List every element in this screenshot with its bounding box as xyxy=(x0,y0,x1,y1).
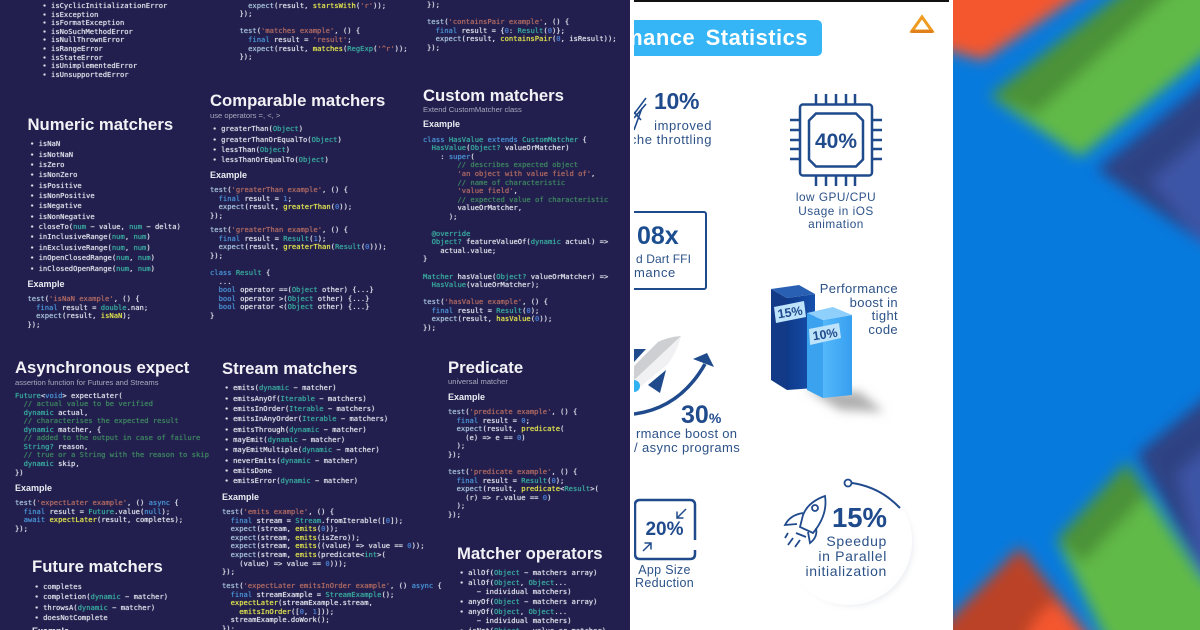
list: future matchers: • throwsA(dynamic − matcher) xyxy=(34,603,155,612)
icon: cache throttling partial xyxy=(634,98,647,130)
panel: dark Flutter matchers cheat sheet xyxy=(0,0,630,630)
list: stream matchers: • emits(dynamic − matcher) xyxy=(224,383,337,392)
list: future matchers xyxy=(34,582,168,622)
chart: 3D bars 15 and 10 percent: 15% xyxy=(777,304,804,321)
list: matcher operators: • anyOf(Object − matchers array) xyxy=(460,597,597,606)
list: stream matchers xyxy=(224,383,388,485)
list: numeric matchers: • isNegative xyxy=(30,201,82,210)
subtitle: asynchronous expect description: assertion function for Futures and Streams xyxy=(15,378,159,386)
stat: 15 percent: 15% xyxy=(832,502,887,533)
icon: white rocket with arrow arc xyxy=(634,336,714,416)
code: greaterThan examples: test('greaterThan example', () { final result = Result(1); expect(result, greaterThan(Result(0))); }); xyxy=(210,225,387,260)
label: performance boost in tight code: Performance xyxy=(820,281,898,296)
list: stream matchers: • emitsDone xyxy=(224,466,272,475)
label: improved cache throttling: che throttling xyxy=(630,132,712,146)
label: low GPU CPU usage: Usage in iOS xyxy=(798,204,874,218)
heading: predicate: Predicate xyxy=(448,358,523,377)
code: greaterThan examples: class Result { ... bool operator ==(Object other) {...} bool operator >(Object other) {...} bool operator <(Object other) {...} } xyxy=(210,268,374,320)
icon: rocket outline and arc xyxy=(784,478,901,548)
heading: comparable matchers: Comparable matchers xyxy=(210,91,385,110)
code: greaterThan examples: test('greaterThan example', () { final result = 1; expect(result, greaterThan(0)); }); xyxy=(210,185,352,220)
label: improved cache throttling: improved xyxy=(654,118,712,133)
heading: future matchers: Future matchers xyxy=(32,557,163,576)
heading: custom matchers: Custom matchers xyxy=(423,86,564,105)
chart: 3D bars 15 and 10 percent: 10% xyxy=(812,326,839,343)
label: Dart FFI performance: d Dart FFI xyxy=(636,252,691,266)
label: low GPU CPU usage xyxy=(796,190,876,231)
label: app size reduction: Reduction xyxy=(635,576,694,590)
list: numeric matchers: • isNaN xyxy=(30,139,60,148)
label: async programs: / async programs xyxy=(634,440,740,454)
chart: 3D bars 15 and 10 percent xyxy=(771,285,884,418)
list: stream matchers: • emitsInAnyOrder(Iterable − matchers) xyxy=(224,414,388,423)
list: numeric matchers: • isNonNegative xyxy=(30,212,95,221)
label: custom example: Example xyxy=(423,119,460,129)
list: numeric matchers: • inClosedOpenRange(num, num) xyxy=(30,264,155,273)
heading: asynchronous expect: Asynchronous expect xyxy=(15,358,189,377)
stat box: 08x Dart FFI xyxy=(624,211,707,290)
label: speedup in parallel initialization xyxy=(806,532,887,578)
list: comparable matchers: • lessThan(Object) xyxy=(212,145,290,154)
label: speedup in parallel initialization: in Parallel xyxy=(818,548,887,564)
label: low GPU CPU usage: animation xyxy=(808,217,864,231)
label: speedup in parallel initialization: Speedup xyxy=(826,532,887,548)
list: numeric matchers: • isPositive xyxy=(30,181,82,190)
list: stream matchers: • emitsError(dynamic − matcher) xyxy=(224,476,358,485)
label: performance boost in tight code: tight xyxy=(872,308,898,323)
label: performance boost in tight code xyxy=(820,281,898,336)
list: matcher operators: • allOf(Object, Object... − individual matchers) xyxy=(460,578,572,596)
code: greaterThan examples xyxy=(210,185,387,320)
code: isNaN example: test('isNaN example', () { final result = double.nan; expect(result, isNaN); }); xyxy=(28,294,148,329)
icon: chip with 40 percent xyxy=(790,94,882,186)
subtitle: universal matcher: universal matcher xyxy=(448,377,508,386)
list: stream matchers: • neverEmits(dynamic − matcher) xyxy=(224,456,358,465)
list: future matchers: • doesNotComplete xyxy=(34,613,108,622)
code: HasValue custom matcher: class HasValue extends CustomMatcher { HasValue(Object? valueOrMatcher) : super( // describes expected object 'an object with value field of', // name of characteristic 'value field', // expected value of characteristic valueOrMatcher, ); @override Object? featureValueOf(dynamic actual) => actual.value; } Matcher hasValue(Object? valueOrMatcher) => HasValue(valueOrMatcher); test('hasValue example', () { final result = Result(0); expect(result, hasValue(0)); }); xyxy=(423,135,608,332)
label: numeric example: Example xyxy=(28,278,65,288)
stat: 10 percent: 10% xyxy=(654,88,699,114)
heading: stream matchers: Stream matchers xyxy=(222,359,357,378)
list: comparable matchers xyxy=(212,124,342,164)
label: performance fragment: mance xyxy=(634,264,676,280)
list: matcher operators xyxy=(460,568,606,630)
list: numeric matchers: • isNotNaN xyxy=(30,150,73,159)
icon: orange triangle logo xyxy=(909,14,935,33)
list: future matchers: • completes xyxy=(34,582,82,591)
list: stream matchers: • mayEmit(dynamic − matcher) xyxy=(224,435,345,444)
list: matcher operators: • allOf(Object − matchers array) xyxy=(460,568,597,577)
list: comparable matchers: • greaterThan(Object) xyxy=(212,124,303,133)
code: predicate examples: test('predicate example', () { final result = 0; expect(result, predicate( (e) => e == 0) ); }); test('predicate example', () { final result = Result(0); expect(result, predicate<Result>( (r) => r.value == 0) ); }); xyxy=(448,407,599,519)
stat: 30 percent: 30% xyxy=(681,401,721,429)
stat: 08x: 08x xyxy=(637,222,679,250)
label: improved cache throttling xyxy=(630,118,712,146)
code: expectLater example: test('expectLater example', () async { final result = Future.value(null); await expectLater(result, completes); }); xyxy=(15,498,183,533)
heading: performance statistics pill xyxy=(634,20,822,56)
list: comparable matchers: • greaterThanOrEqualTo(Object) xyxy=(212,135,342,144)
list: future matchers: • completion(dynamic − matcher) xyxy=(34,592,168,601)
panel: performance statistics xyxy=(630,0,953,630)
label: async example: Example xyxy=(15,482,52,492)
list: stream matchers: • emitsInOrder(Iterable − matchers) xyxy=(224,404,375,413)
subtitle: custom matcher class: Extend CustomMatcher class xyxy=(423,105,522,114)
list: numeric matchers: • closeTo(num − value, num − delta) xyxy=(30,222,181,231)
label: performance boost on async programs: rmance boost on xyxy=(636,426,737,440)
code: emits examples: test('emits example', () { final stream = Stream.fromIterable([0]); expect(stream, emits(0)); expect(stream, emits(isZero)); expect(stream, emits((value) => value == 0)); expect(stream, emits(predicate<int>( (value) => value == 0))); }); xyxy=(222,508,425,576)
label: app size reduction: App Size xyxy=(638,562,691,576)
heading: numeric matchers: Numeric matchers xyxy=(28,115,173,134)
icon: 20 percent app size box: 20% xyxy=(645,519,684,540)
code: emits examples xyxy=(222,508,442,630)
list: matcher operators: • anyOf(Object, Object... − individual matchers) xyxy=(460,607,572,625)
label: predicate example: Example xyxy=(448,392,485,402)
label: performance boost in tight code: code xyxy=(868,322,898,336)
code: containsPair example: }); test('containsPair example', () { final result = {0: Result(0)}; expect(result, containsPair(0, isResult)); }); xyxy=(427,0,617,52)
list: numeric matchers: • inOpenClosedRange(num, num) xyxy=(30,253,155,262)
subtitle: comparable operators: use operators =, <, > xyxy=(210,110,280,120)
top border line xyxy=(634,0,949,2)
label: low GPU CPU usage: low GPU/CPU xyxy=(796,190,876,204)
label: speedup in parallel initialization: initialization xyxy=(806,562,887,578)
list: numeric matchers: • inExclusiveRange(num, num) xyxy=(30,243,151,252)
code: matches example: expect(result, startsWith('r')); }); test('matches example', () { final result = 'result'; expect(result, matches(RegExp('^r')); }); xyxy=(240,1,408,61)
heading: matcher operators: Matcher operators xyxy=(457,544,603,562)
icon: 20 percent app size box xyxy=(634,498,696,560)
label: app size reduction xyxy=(635,562,694,590)
list: numeric matchers: • isNonZero xyxy=(30,170,77,179)
list: comparable matchers: • lessThanOrEqualTo(Object) xyxy=(212,155,329,164)
list: numeric matchers: • inInclusiveRange(num, num) xyxy=(30,232,151,241)
panel: blurred colour abstract xyxy=(953,0,1200,630)
list: numeric matchers: • isZero xyxy=(30,160,64,169)
left white gutter clipping content xyxy=(630,0,634,630)
decorative soft disc xyxy=(785,478,912,605)
icon: chip with 40 percent: 40% xyxy=(815,130,857,153)
label: performance boost in tight code: boost in xyxy=(850,294,898,310)
label: comparable example: Example xyxy=(210,170,247,180)
code: expectLater signature: Future<void> expectLater( // actual value to be verified dynamic actual, // characterises the expected result dynamic matcher, { // added to the output in case of failure String? reason, // true or a String with the reason to skip dynamic skip, }) xyxy=(15,391,209,477)
text block: error matcher list: • isCyclicInitializationError • isException • isFormatException • isNoSuchMethodError • isNullThrownError • isRangeError • isStateError • isUnimplementedError • isUnsupportedError xyxy=(42,1,167,79)
list: numeric matchers: • isNonPositive xyxy=(30,191,95,200)
list: numeric matchers xyxy=(30,139,181,273)
list: stream matchers: • emitsAnyOf(Iterable − matchers) xyxy=(224,394,367,403)
list: stream matchers: • emitsThrough(dynamic − matcher) xyxy=(224,425,367,434)
list: stream matchers: • mayEmitMultiple(dynamic − matcher) xyxy=(224,445,380,454)
label: stream example: Example xyxy=(222,492,259,502)
